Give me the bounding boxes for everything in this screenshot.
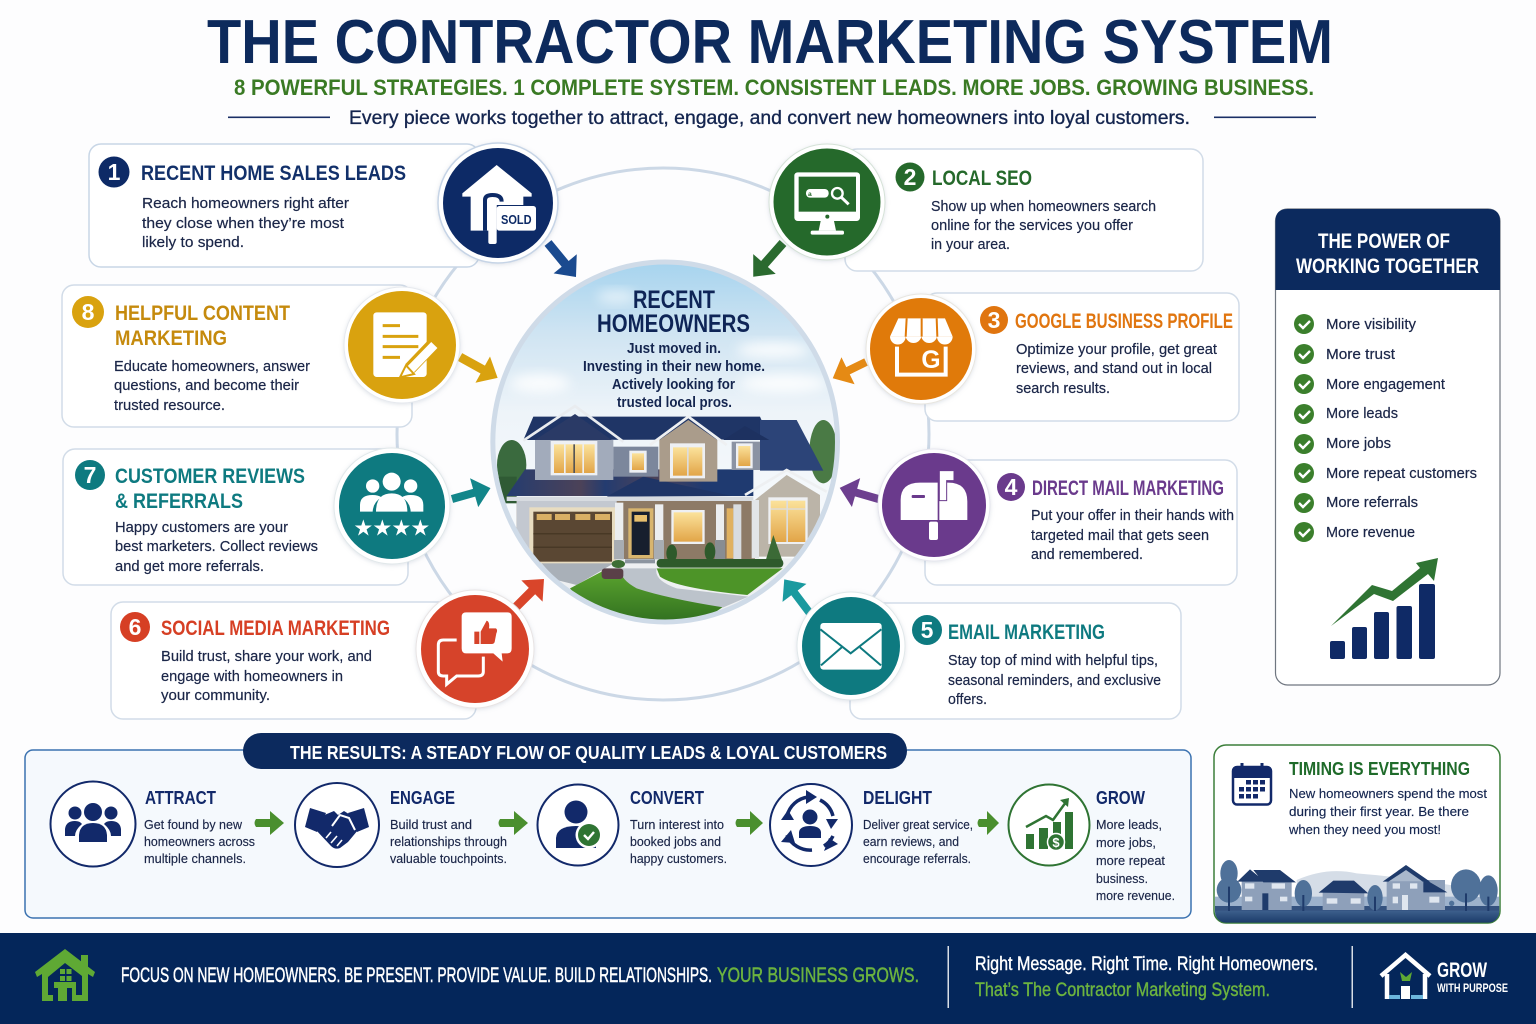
badge 7: 7 — [84, 462, 96, 488]
text 3 — [1016, 341, 1218, 397]
icon 1: sold house — [438, 143, 558, 263]
step: delight: Deliver great service, — [863, 818, 973, 832]
center text — [583, 341, 765, 411]
shrubs — [765, 535, 783, 562]
text 6: engage with homeowners in — [161, 668, 343, 685]
icon 4: mailbox — [878, 449, 990, 561]
tagline: Every piece works together to attract, engage, and convert new homeowners into loyal customers. — [349, 107, 1190, 129]
card: 6 social media marketing — [111, 602, 476, 719]
text 3: reviews, and stand out in local — [1016, 360, 1212, 377]
icon 5: envelope — [797, 592, 905, 700]
logo: grow with purpose: GROW — [1437, 959, 1487, 982]
step: delight: DELIGHT — [863, 788, 932, 808]
checklist: More leads — [1326, 406, 1398, 422]
heading 7 — [115, 465, 305, 513]
card: 5 email marketing — [850, 603, 1181, 719]
badge 2 — [896, 162, 924, 192]
badge 4: 4 — [1005, 474, 1018, 500]
step: engage — [295, 783, 507, 867]
heading 5: EMAIL MARKETING — [948, 621, 1105, 644]
step: grow: More leads, — [1096, 818, 1162, 832]
step: engage: Build trust and — [390, 818, 472, 832]
card: 7 customer reviews and referrals — [63, 449, 408, 585]
center heading — [597, 286, 750, 338]
heading 7: & REFERRALS — [115, 490, 243, 513]
icon: handshake — [305, 808, 369, 849]
center text: Just moved in. — [627, 341, 721, 357]
text 7 — [115, 519, 318, 575]
text 2 — [931, 198, 1156, 253]
step: convert: CONVERT — [630, 788, 704, 808]
text 1: they close when they’re most — [142, 215, 345, 232]
text 4 — [1031, 507, 1234, 563]
text 6: your community. — [161, 687, 270, 704]
step: grow: GROW — [1096, 788, 1145, 808]
timing heading: TIMING IS EVERYTHING — [1289, 759, 1470, 779]
timing text: when they need you most! — [1288, 822, 1441, 837]
arrow: delight to grow — [978, 811, 999, 835]
center circle: recent homeowners — [490, 260, 840, 625]
heading 6: SOCIAL MEDIA MARKETING — [161, 617, 390, 640]
badge 3: 3 — [988, 307, 1000, 333]
step: convert — [538, 784, 727, 866]
arrow: attract to engage — [254, 811, 284, 835]
title: THE CONTRACTOR MARKETING SYSTEM — [207, 8, 1333, 77]
step: grow: business. — [1096, 872, 1148, 886]
upper walls — [535, 440, 613, 480]
heading 2: LOCAL SEO — [932, 167, 1032, 190]
text 6: Build trust, share your work, and — [161, 648, 372, 665]
arrow 1 — [536, 233, 588, 286]
checklist: More repeat customers — [1326, 466, 1477, 482]
subtitle: 8 POWERFUL STRATEGIES. 1 COMPLETE SYSTEM. CONSISTENT LEADS. MORE JOBS. GROWING BUSINESS. — [234, 75, 1314, 100]
text 5: Stay top of mind with helpful tips, — [948, 652, 1158, 669]
text 1: Reach homeowners right after — [142, 195, 349, 212]
heading 4: DIRECT MAIL MARKETING — [1032, 477, 1224, 500]
text 4: Put your offer in their hands with — [1031, 507, 1234, 524]
trees — [1217, 860, 1498, 910]
card: 1 recent home sales leads — [89, 144, 479, 267]
panel heading: THE POWER OF — [1318, 230, 1450, 253]
icon 2: monitor search: a — [808, 191, 812, 198]
step: attract: multiple channels. — [144, 852, 246, 866]
checklist: More engagement — [1326, 377, 1445, 393]
center text: Actively looking for — [612, 377, 735, 393]
badge 6: 6 — [129, 614, 141, 640]
center heading: HOMEOWNERS — [597, 310, 750, 338]
step: delight — [770, 784, 973, 866]
step: convert: booked jobs and — [630, 835, 721, 849]
badge 8: 8 — [82, 299, 95, 325]
text 1 — [142, 195, 349, 251]
text 8 — [114, 358, 310, 414]
panel: the power of working together — [1276, 209, 1500, 685]
text 1: likely to spend. — [142, 234, 244, 251]
footer slogan — [975, 953, 1318, 1001]
step: delight: earn reviews, and — [863, 835, 959, 849]
icon: cycle arrows — [781, 790, 838, 851]
arrow 4 — [836, 473, 886, 514]
checklist — [1294, 314, 1477, 542]
badge 3 — [980, 306, 1008, 334]
heading 3: GOOGLE BUSINESS PROFILE — [1015, 310, 1233, 333]
panel heading — [1296, 230, 1479, 278]
step: attract: homeowners across — [144, 835, 255, 849]
timing text: New homeowners spend the most — [1289, 786, 1487, 801]
roofs — [523, 417, 770, 440]
heading 8: MARKETING — [115, 327, 227, 350]
illustration: neighborhood — [1215, 860, 1499, 924]
icon: person with check — [556, 800, 602, 848]
step: engage: ENGAGE — [390, 788, 455, 808]
step: grow — [1008, 784, 1175, 903]
icon 8: document and pencil — [344, 287, 460, 403]
footer message: FOCUS ON NEW HOMEOWNERS. BE PRESENT. PROVIDE VALUE. BUILD RELATIONSHIPS. — [121, 964, 712, 987]
text 8: questions, and become their — [114, 377, 299, 394]
step: convert: Turn interest into — [630, 818, 724, 832]
card: 3 google business profile — [925, 293, 1239, 421]
center text: trusted local pros. — [617, 395, 732, 411]
ground floor — [517, 501, 755, 559]
arrow: convert to delight — [736, 811, 763, 835]
badge 2: 2 — [904, 164, 916, 190]
checklist: More referrals — [1326, 495, 1418, 511]
icon: growth bars with coin: $ — [1052, 835, 1060, 850]
house right — [1387, 880, 1445, 910]
panel: timing is everything — [1214, 745, 1500, 924]
icon 2: monitor search — [769, 144, 885, 260]
text 8: trusted resource. — [114, 397, 225, 414]
heading 1: RECENT HOME SALES LEADS — [141, 162, 406, 185]
icon 3: storefront — [866, 294, 976, 404]
icon: growth bars with coin — [1026, 798, 1073, 850]
center heading: RECENT — [633, 286, 715, 314]
text 2: in your area. — [931, 236, 1010, 253]
step: grow: more revenue. — [1096, 889, 1175, 903]
footer message: YOUR BUSINESS GROWS. — [717, 964, 919, 987]
timing text — [1288, 786, 1487, 837]
panel heading: WORKING TOGETHER — [1296, 255, 1479, 278]
timing text: during their first year. Be there — [1289, 804, 1469, 819]
checklist: More revenue — [1326, 525, 1415, 541]
house left — [1242, 880, 1292, 910]
results banner — [243, 733, 907, 769]
step: engage: valuable touchpoints. — [390, 852, 507, 866]
text 7: best marketers. Collect reviews — [115, 538, 318, 555]
checklist: More visibility — [1326, 317, 1417, 333]
step: attract — [50, 782, 255, 866]
upper windows — [551, 441, 597, 475]
arrow 5 — [772, 570, 827, 629]
arrow 3 — [826, 349, 873, 392]
text 5: seasonal reminders, and exclusive — [948, 672, 1161, 689]
step: grow: more jobs, — [1096, 836, 1156, 850]
icon: people — [65, 803, 121, 842]
badge 5: 5 — [921, 617, 934, 643]
connecting ring — [397, 168, 929, 700]
heading 7: CUSTOMER REVIEWS — [115, 465, 305, 488]
text 3: search results. — [1016, 380, 1110, 397]
badge 7 — [75, 460, 105, 490]
card: 8 helpful content marketing — [62, 285, 412, 427]
icon 7: people with stars — [334, 448, 450, 564]
arrow 8 — [453, 344, 505, 391]
checklist: More trust — [1326, 347, 1395, 363]
badge 1: 1 — [108, 159, 121, 185]
text 8: Educate homeowners, answer — [114, 358, 310, 375]
card: 4 direct mail marketing — [925, 460, 1237, 585]
badge 8 — [72, 296, 104, 328]
step: engage: relationships through — [390, 835, 507, 849]
text 7: and get more referrals. — [115, 558, 264, 575]
text 2: Show up when homeowners search — [931, 198, 1156, 215]
step: delight: encourage referrals. — [863, 852, 971, 866]
results banner: THE RESULTS: A STEADY FLOW OF QUALITY LEADS & LOYAL CUSTOMERS — [290, 743, 887, 763]
badge 6 — [120, 612, 150, 642]
step: grow: more repeat — [1096, 854, 1166, 868]
icon 3: storefront: G — [921, 347, 941, 374]
text 4: targeted mail that gets seen — [1031, 527, 1209, 544]
checklist: More jobs — [1326, 436, 1391, 452]
growth chart — [1330, 558, 1438, 659]
right wing — [755, 475, 820, 557]
icon 6: chat bubbles with thumb — [416, 590, 534, 708]
text 3: Optimize your profile, get great — [1016, 341, 1218, 358]
card: 2 local seo — [845, 149, 1203, 271]
step: convert: happy customers. — [630, 852, 727, 866]
logo: grow with purpose: WITH PURPOSE — [1437, 983, 1508, 995]
arrow: engage to convert — [498, 811, 528, 835]
footer band — [0, 933, 1536, 1024]
heading 8 — [115, 302, 290, 350]
logo: grow with purpose — [1381, 955, 1508, 999]
arrow 6 — [504, 568, 555, 619]
badge 5 — [912, 615, 942, 645]
text 6 — [161, 648, 372, 704]
ground — [560, 558, 793, 610]
arrow 7 — [448, 474, 495, 513]
text 7: Happy customers are your — [115, 519, 288, 536]
text 5 — [948, 652, 1161, 708]
badge 1 — [98, 156, 130, 188]
text 5: offers. — [948, 691, 987, 708]
text 4: and remembered. — [1031, 546, 1143, 563]
house mid — [1323, 892, 1364, 910]
arrow 2 — [742, 233, 794, 287]
center text: Investing in their new home. — [583, 359, 765, 375]
heading 8: HELPFUL CONTENT — [115, 302, 290, 325]
text 2: online for the services you offer — [931, 217, 1133, 234]
trees — [497, 440, 526, 482]
step: attract: Get found by new — [144, 818, 243, 832]
panel: the results — [25, 733, 1191, 918]
badge 4 — [997, 473, 1025, 501]
step: attract: ATTRACT — [145, 788, 216, 808]
footer slogan: That’s The Contractor Marketing System. — [975, 979, 1270, 1001]
footer slogan: Right Message. Right Time. Right Homeowners. — [975, 953, 1318, 975]
icon 1: sold house: SOLD — [501, 213, 532, 227]
icon: green house — [35, 949, 95, 1001]
icon: calendar — [1233, 763, 1271, 804]
